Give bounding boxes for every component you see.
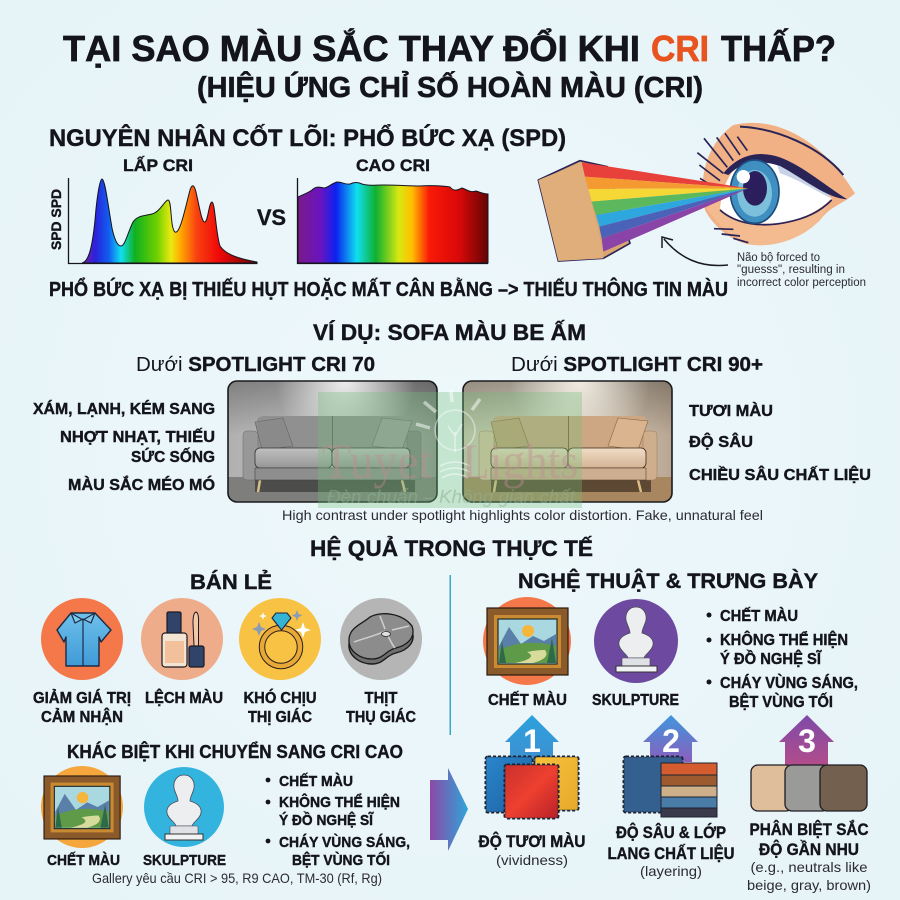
- list: art effects: KHÔNG THỂ HIỆN: [720, 630, 848, 649]
- list: high CRI effects: Ý ĐỒ NGHỆ SĨ: [279, 811, 374, 829]
- label: perceived value: [33, 690, 131, 726]
- label: close shades: PHÂN BIỆT SẮC: [750, 820, 869, 839]
- icon: arrow 2: [643, 715, 698, 762]
- list: high CRI effects: [266, 773, 410, 869]
- text: low CRI effects: XÁM, LẠNH, KÉM SANG: [33, 399, 215, 418]
- icon: sculpture bust (high CRI): [144, 767, 224, 847]
- label: meat: THỤ GIÁC: [346, 709, 416, 726]
- icon: framed painting (high CRI): [41, 766, 123, 848]
- heading: art and display: NGHỆ THUẬT & TRƯNG BÀY: [518, 569, 818, 593]
- list: high CRI effects: CHÁY VÙNG SÁNG,: [279, 833, 410, 851]
- icon: arrow 3: [779, 715, 834, 770]
- list: art effects: [706, 606, 858, 711]
- label: close shades: (e.g., neutrals like: [750, 859, 868, 875]
- title: THẤP?: [721, 28, 836, 69]
- label: meat: [346, 690, 416, 726]
- label: under CRI 70: Dưới SPOTLIGHT CRI 70: [136, 354, 375, 376]
- photo: sofa under CRI 70: [228, 381, 437, 502]
- arrow: transition to high CRI: [430, 768, 468, 851]
- label: vividness: ĐỘ TƯƠI MÀU: [478, 832, 586, 851]
- watermark: Tuyet Lights: [318, 390, 582, 508]
- label: visual discomfort: [244, 689, 316, 726]
- label: depth and layering: LANG CHẤT LIỆU: [608, 844, 734, 863]
- label: sculpture (art): SKULPTURE: [592, 692, 679, 709]
- label: meat: THỊT: [364, 690, 398, 707]
- heading: difference with high CRI: KHÁC BIỆT KHI CHUYỂN SANG CRI CAO: [67, 741, 403, 762]
- label: perceived value: GIẢM GIÁ TRỊ: [33, 690, 131, 707]
- text: spectrum deficiency statement: PHỔ BỨC XẠ BỊ THIẾU HỤT HOẶC MẤT CÂN BẰNG –> THIẾU THÔNG TIN MÀU: [49, 277, 728, 301]
- icon: eye with prism and rainbow: [538, 123, 855, 261]
- chart: low CRI spectrum: [49, 156, 258, 264]
- icon: arrow 1: 1: [523, 723, 541, 759]
- icon: nail polish: [141, 598, 223, 680]
- label: dead color (high CRI): CHẾT MÀU: [47, 852, 120, 869]
- callout: brain guesses: [662, 237, 866, 289]
- list: art effects: CHÁY VÙNG SÁNG,: [720, 673, 858, 692]
- icon: arrow 1: [505, 715, 559, 762]
- callout: brain guesses: Não bộ forced to: [737, 252, 820, 264]
- heading: core cause: NGUYÊN NHÂN CỐT LÕI: PHỔ BỨC XẠ (SPD): [49, 124, 566, 152]
- chart: high CRI spectrum: [298, 156, 488, 264]
- label: visual discomfort: THỊ GIÁC: [248, 709, 312, 726]
- text: high CRI effects: CHIỀU SÂU CHẤT LIỆU: [689, 465, 871, 484]
- chart: high CRI spectrum: CAO CRI: [356, 156, 430, 175]
- icon: vivid fabric swatches: [486, 757, 578, 818]
- note: gallery requirements: Gallery yêu cầu CRI > 95, R9 CAO, TM-30 (Rf, Rg): [92, 870, 382, 886]
- label: close shades: [747, 820, 871, 893]
- label: depth and layering: ĐỘ SÂU & LỚP: [616, 823, 726, 842]
- text: low CRI effects: SỨC SỐNG: [131, 446, 215, 466]
- watermark: Tuyet Lights: Tuyet: [322, 433, 432, 489]
- text: high CRI effects: ĐỘ SÂU: [689, 432, 753, 451]
- icon: neutral swatches: [751, 765, 867, 811]
- label: vividness: [478, 832, 586, 868]
- text: low CRI effects: NHỢT NHẠT, THIẾU: [60, 427, 215, 446]
- icon: arrow 2: 2: [662, 723, 680, 759]
- label: close shades: ĐỘ GẦN NHU: [759, 840, 859, 859]
- label: vividness: (vividness): [496, 852, 568, 868]
- list: art effects: BỆT VÙNG TỐI: [729, 691, 833, 711]
- icon: shirt: [41, 598, 123, 680]
- label: sculpture (high CRI): SKULPTURE: [143, 852, 226, 869]
- photo: sofa under CRI 90+: [463, 381, 672, 502]
- icon: sculpture bust (art): [594, 599, 678, 683]
- icon: diamond ring: [239, 598, 321, 680]
- heading: real-world consequences: HỆ QUẢ TRONG THỰC TẾ: [310, 536, 593, 561]
- label: color shift: LỆCH MÀU: [145, 689, 223, 707]
- label: under CRI 90+: Dưới SPOTLIGHT CRI 90+: [511, 354, 763, 376]
- callout: brain guesses: "guesss", resulting in: [737, 264, 845, 276]
- subtitle: (HIỆU ỨNG CHỈ SỐ HOÀN MÀU (CRI): [197, 70, 703, 104]
- label: dead color (art): CHẾT MÀU: [488, 692, 567, 709]
- watermark: Tuyet Lights: Lights: [462, 433, 578, 489]
- icon: framed painting (art): [483, 597, 571, 685]
- chart: low CRI spectrum: SPD SPD: [49, 189, 64, 250]
- callout: brain guesses: incorrect color perception: [737, 277, 866, 289]
- list: art effects: CHẾT MÀU: [720, 606, 798, 625]
- list: art effects: Ý ĐỒ NGHỆ SĨ: [720, 648, 822, 668]
- list: high CRI effects: CHẾT MÀU: [279, 773, 353, 790]
- title: TẠI SAO MÀU SẮC THAY ĐỔI KHI: [63, 26, 640, 69]
- caption: high contrast note: High contrast under spotlight highlights color distortion. Fake, unnatural feel: [282, 507, 763, 523]
- text: low CRI effects: MÀU SẮC MÉO MÓ: [68, 475, 215, 494]
- label: depth and layering: [608, 823, 734, 879]
- label: depth and layering: (layering): [640, 863, 702, 879]
- watermark: Tuyet Lights: Đèn chuẩn – Không gian chất: [327, 487, 576, 507]
- text: low CRI effects: [33, 399, 215, 494]
- icon: gray steak: [340, 598, 422, 680]
- heading: retail: BÁN LẺ: [190, 571, 272, 594]
- text: high CRI effects: TƯƠI MÀU: [689, 401, 773, 420]
- icon: layered fabric swatches: [624, 757, 717, 817]
- label: vs: VS: [257, 205, 286, 230]
- heading: sofa example: VÍ DỤ: SOFA MÀU BE ẤM: [313, 320, 586, 345]
- chart: low CRI spectrum: LẤP CRI: [123, 156, 193, 175]
- text: high CRI effects: [689, 401, 871, 484]
- icon: arrow 3: 3: [798, 723, 816, 759]
- list: high CRI effects: KHÔNG THỂ HIỆN: [279, 793, 400, 811]
- label: visual discomfort: KHÓ CHỊU: [244, 689, 316, 707]
- list: high CRI effects: BỆT VÙNG TỐI: [292, 851, 390, 869]
- label: perceived value: CẢM NHẬN: [41, 708, 123, 726]
- label: close shades: beige, gray, brown): [747, 877, 871, 893]
- title: CRI: [651, 28, 709, 69]
